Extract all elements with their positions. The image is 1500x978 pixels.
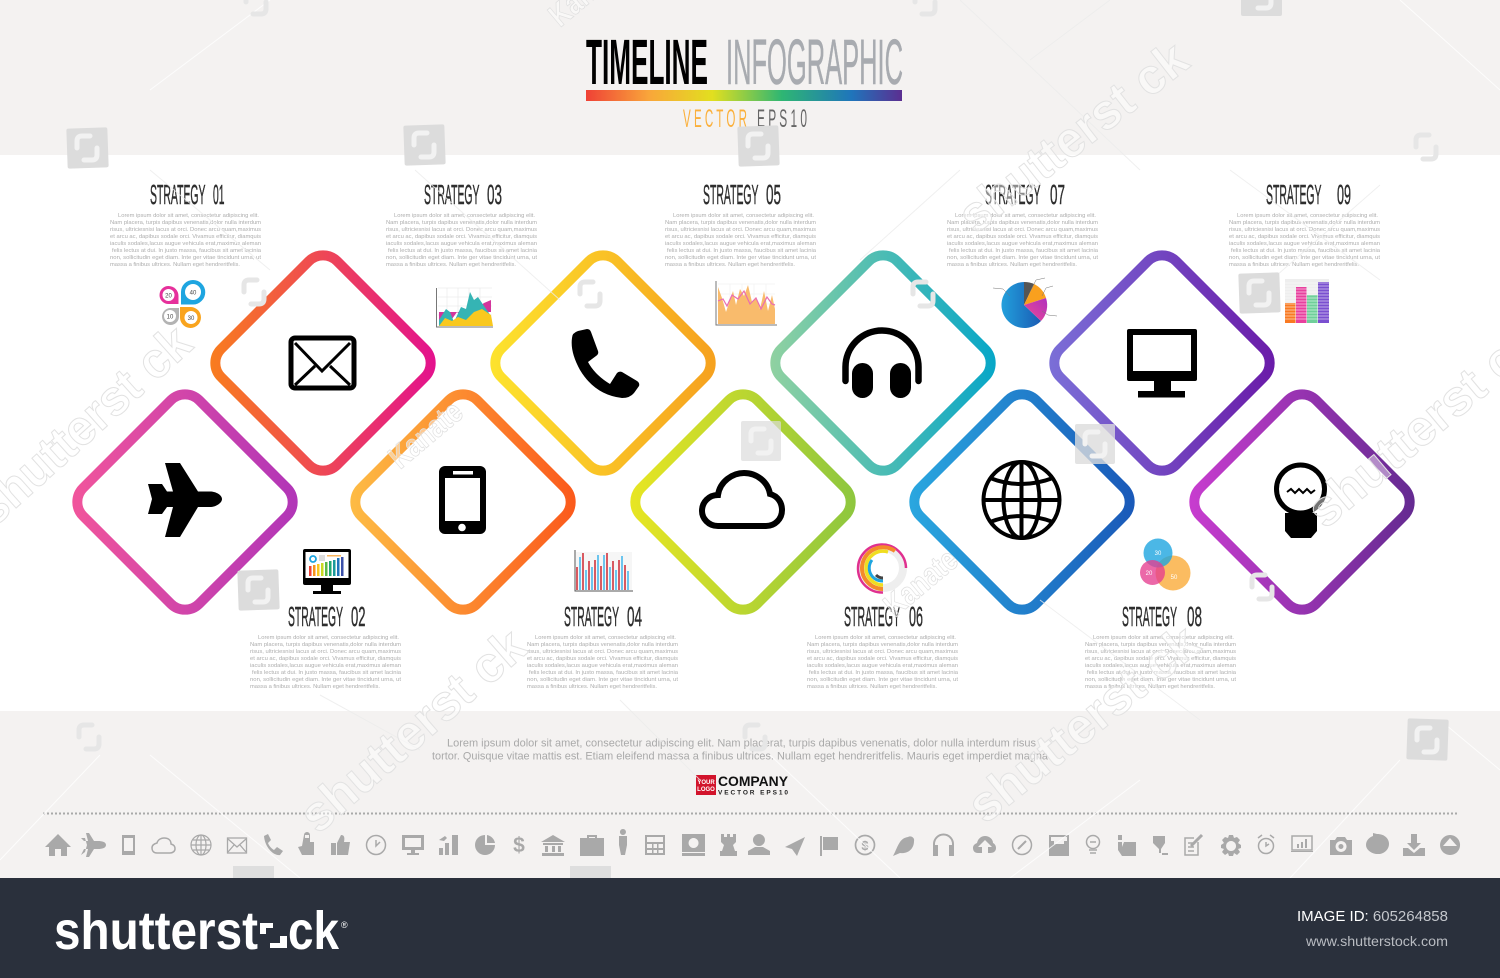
watermark: shutterstock wordmarks: shutterst ck bbox=[957, 614, 1210, 834]
icon strip bbox=[45, 829, 1460, 857]
strategy 06 text: STRATEGY bbox=[844, 601, 900, 632]
strategy 03 text: risus, ultriciesnisi lacus at orci. Donec arcu quam,maximus bbox=[386, 227, 537, 233]
strategy 04 text bbox=[527, 601, 679, 690]
chart: four number petals: 20 bbox=[165, 294, 172, 300]
strategy 07 text: Lorem ipsum dolor sit amet, consectetur adipiscing elit. bbox=[955, 213, 1096, 219]
strategy 04 text: 04 bbox=[627, 601, 642, 632]
icon: calculator bbox=[645, 835, 665, 855]
strategy 07 text: iaculis sodales,lacus augue vehicula erat,maximus aleman bbox=[947, 241, 1098, 247]
icon: flag bbox=[820, 836, 838, 856]
strategy 09 text: felis lectus at dui. In justo massa, faucibus sit amet lacinia bbox=[1231, 248, 1381, 254]
strategy 01 text: et arcu ac, dapibus sodale orci. Vivamus efficitur, diamquis bbox=[110, 234, 261, 240]
icon: thumbs up bbox=[331, 835, 350, 855]
strategy 08 text bbox=[1085, 601, 1237, 690]
icon: monitor bbox=[402, 835, 424, 855]
strategy 07 text: et arcu ac, dapibus sodale orci. Vivamus efficitur, diamquis bbox=[947, 234, 1098, 240]
icon: plane bbox=[81, 833, 106, 857]
strategy 07 text bbox=[947, 179, 1099, 268]
strategy 07 text: Nam placera, turpis dapibus venenatis,dolor nulla interdum bbox=[947, 220, 1098, 226]
strategy 08 text: et arcu ac, dapibus sodale orci. Vivamus efficitur, diamquis bbox=[1085, 656, 1236, 662]
chart: four number petals: 10 bbox=[167, 314, 174, 320]
title: E P S 1 0 bbox=[757, 105, 807, 133]
strategy 01 text: non, sollicitudin eget diam. Inte ger vitae tincidunt urna, ut bbox=[110, 255, 261, 261]
strategy 05 text: STRATEGY bbox=[703, 179, 759, 210]
strategy 08 text: risus, ultriciesnisi lacus at orci. Donec arcu quam,maximus bbox=[1085, 649, 1236, 655]
strategy 04 text: massa a finibus ultrices. Nullam eget hendreritfelis. bbox=[527, 684, 657, 690]
strategy 03 text: STRATEGY bbox=[424, 179, 480, 210]
chart: red and blue bars bbox=[575, 550, 633, 591]
icon: pen nib bbox=[1153, 836, 1168, 855]
icon: coin: $ bbox=[861, 838, 869, 853]
chart: striped bars bbox=[1285, 279, 1329, 323]
strategy 03 text: Nam placera, turpis dapibus venenatis,dolor nulla interdum bbox=[386, 220, 537, 226]
company logo: COMPANY bbox=[718, 774, 788, 789]
icon: user bbox=[748, 834, 770, 855]
footer paragraph bbox=[432, 738, 1048, 762]
watermark: shutterstock wordmarks: shutterst ck bbox=[288, 617, 537, 843]
chart: four number petals bbox=[160, 280, 205, 328]
strategy 06 text: non, sollicitudin eget diam. Inte ger vitae tincidunt urna, ut bbox=[807, 677, 958, 683]
strategy 09 text bbox=[1229, 179, 1381, 268]
strategy 06 text: massa a finibus ultrices. Nullam eget hendreritfelis. bbox=[807, 684, 937, 690]
watermark: contributor names: Kanate bbox=[876, 541, 965, 623]
icon: gear bbox=[1221, 835, 1241, 856]
chart: dashboard monitor bbox=[303, 549, 351, 594]
strategy 07 text: non, sollicitudin eget diam. Inte ger vitae tincidunt urna, ut bbox=[947, 255, 1098, 261]
company logo: LOGO bbox=[697, 787, 715, 793]
strategy 01 text: iaculis sodales,lacus augue vehicula erat,maximus aleman bbox=[110, 241, 261, 247]
watermark: shutterstock wordmarks: shutterst ck bbox=[947, 30, 1199, 244]
strategy 02 text: massa a finibus ultrices. Nullam eget hendreritfelis. bbox=[250, 684, 380, 690]
icon: piggy bank bbox=[1366, 833, 1389, 854]
strategy 02 text: felis lectus at dui. In justo massa, faucibus sit amet lacinia bbox=[252, 670, 402, 676]
strategy 07 text: massa a finibus ultrices. Nullam eget hendreritfelis. bbox=[947, 262, 1077, 268]
strategy 02 text: Nam placera, turpis dapibus venenatis,dolor nulla interdum bbox=[250, 642, 401, 648]
chart: venn: 50 bbox=[1171, 575, 1178, 581]
chart: venn: 20 bbox=[1146, 571, 1153, 577]
strategy 06 text: Nam placera, turpis dapibus venenatis,dolor nulla interdum bbox=[807, 642, 958, 648]
icon: cloud upload bbox=[973, 836, 996, 853]
icon: alarm clock bbox=[1258, 835, 1274, 854]
strategy 09 text: non, sollicitudin eget diam. Inte ger vitae tincidunt urna, ut bbox=[1229, 255, 1380, 261]
strategy 03 text: massa a finibus ultrices. Nullam eget hendreritfelis. bbox=[386, 262, 516, 268]
strategy 05 text: massa a finibus ultrices. Nullam eget hendreritfelis. bbox=[665, 262, 795, 268]
watermark: contributor names bbox=[381, 0, 965, 623]
chart: four number petals: 40 bbox=[190, 290, 197, 296]
strategy 01 text bbox=[110, 179, 262, 268]
strategy 08 text: non, sollicitudin eget diam. Inte ger vitae tincidunt urna, ut bbox=[1085, 677, 1236, 683]
strategy 05 text: et arcu ac, dapibus sodale orci. Vivamus efficitur, diamquis bbox=[665, 234, 816, 240]
strategy 06 text: risus, ultriciesnisi lacus at orci. Donec arcu quam,maximus bbox=[807, 649, 958, 655]
icon: camera bbox=[1330, 837, 1352, 855]
icon: touch bbox=[298, 832, 314, 855]
icon: archive box bbox=[1049, 835, 1069, 856]
strategy 08 text: iaculis sodales,lacus augue vehicula erat,maximus aleman bbox=[1085, 663, 1236, 669]
company logo: YOUR bbox=[697, 780, 715, 786]
icon: headphones bbox=[934, 835, 953, 855]
strategy 02 text: et arcu ac, dapibus sodale orci. Vivamus efficitur, diamquis bbox=[250, 656, 401, 662]
strategy 04 text: et arcu ac, dapibus sodale orci. Vivamus efficitur, diamquis bbox=[527, 656, 678, 662]
icon: person bbox=[619, 829, 627, 855]
chart: rainbow radial bbox=[858, 545, 906, 593]
strategy 03 text: non, sollicitudin eget diam. Inte ger vitae tincidunt urna, ut bbox=[386, 255, 537, 261]
shutterstock logo: shutterst bbox=[54, 901, 258, 961]
strategy 09 text: Lorem ipsum dolor sit amet, consectetur adipiscing elit. bbox=[1237, 213, 1378, 219]
diamond 4: telephone bbox=[487, 247, 719, 479]
icon: pie bbox=[475, 835, 495, 855]
title: V E C T O R bbox=[683, 105, 747, 133]
strategy 09 text: et arcu ac, dapibus sodale orci. Vivamus efficitur, diamquis bbox=[1229, 234, 1380, 240]
strategy 06 text: 06 bbox=[909, 601, 923, 632]
strategy 08 text: Nam placera, turpis dapibus venenatis,dolor nulla interdum bbox=[1085, 642, 1236, 648]
strategy 04 text: iaculis sodales,lacus augue vehicula erat,maximus aleman bbox=[527, 663, 678, 669]
strategy 08 text: 08 bbox=[1187, 601, 1202, 632]
strategy 07 text: risus, ultriciesnisi lacus at orci. Donec arcu quam,maximus bbox=[947, 227, 1098, 233]
shutterstock logo: ck bbox=[288, 901, 340, 961]
icon: paper plane bbox=[785, 837, 805, 856]
strategy 08 text: Lorem ipsum dolor sit amet, consectetur adipiscing elit. bbox=[1093, 635, 1234, 641]
strategy 03 text: 03 bbox=[487, 179, 502, 210]
diamond 2: envelope bbox=[207, 247, 439, 479]
strategy 08 text: massa a finibus ultrices. Nullam eget hendreritfelis. bbox=[1085, 684, 1215, 690]
icon: telephone bbox=[264, 834, 283, 855]
strategy 05 text: Nam placera, turpis dapibus venenatis,dolor nulla interdum bbox=[665, 220, 816, 226]
icon: bulb bbox=[1086, 836, 1100, 853]
strategy 03 text: Lorem ipsum dolor sit amet, consectetur adipiscing elit. bbox=[394, 213, 535, 219]
title: TIMELINE bbox=[586, 26, 708, 98]
strategy 09 text: 09 bbox=[1337, 179, 1351, 210]
company logo bbox=[696, 774, 788, 796]
strategy 07 text: 07 bbox=[1050, 179, 1065, 210]
icon: globe bbox=[191, 835, 211, 855]
footer paragraph: tortor. Quisque vitae mattis est. Etiam eleifend massa a finibus ultrices. Nullam eget hendreritfelis. Mauris eget imperdiet magna bbox=[432, 750, 1048, 762]
watermark: contributor names: Kanate bbox=[381, 393, 470, 475]
strategy 05 text: 05 bbox=[766, 179, 781, 210]
icon: bank bbox=[541, 835, 565, 856]
strategy 03 text bbox=[386, 179, 538, 268]
diamond 9: light bulb bbox=[1186, 386, 1418, 618]
title bbox=[586, 26, 903, 133]
strategy 06 text: et arcu ac, dapibus sodale orci. Vivamus efficitur, diamquis bbox=[807, 656, 958, 662]
icon: bird bbox=[893, 836, 914, 856]
strategy 02 text: non, sollicitudin eget diam. Inte ger vitae tincidunt urna, ut bbox=[250, 677, 401, 683]
strategy 02 text: STRATEGY bbox=[288, 601, 343, 632]
strategy 01 text: 01 bbox=[213, 179, 224, 210]
strategy 04 text: non, sollicitudin eget diam. Inte ger vitae tincidunt urna, ut bbox=[527, 677, 678, 683]
diamond 8: monitor bbox=[1046, 247, 1278, 479]
chart: orange line chart bbox=[716, 281, 777, 325]
strategy 09 text: risus, ultriciesnisi lacus at orci. Donec arcu quam,maximus bbox=[1229, 227, 1380, 233]
strategy 06 text bbox=[807, 601, 959, 690]
icon: briefcase bbox=[580, 835, 604, 856]
strategy 05 text: Lorem ipsum dolor sit amet, consectetur adipiscing elit. bbox=[673, 213, 814, 219]
strategy 09 text: Nam placera, turpis dapibus venenatis,dolor nulla interdum bbox=[1229, 220, 1380, 226]
strategy 02 text: iaculis sodales,lacus augue vehicula erat,maximus aleman bbox=[250, 663, 401, 669]
company logo: VECTOR EPS10 bbox=[718, 790, 788, 796]
strategy 05 text: risus, ultriciesnisi lacus at orci. Donec arcu quam,maximus bbox=[665, 227, 816, 233]
icon: download bbox=[1403, 834, 1425, 856]
text: INFOGRAPHIC bbox=[726, 26, 903, 98]
strategy 05 text: felis lectus at dui. In justo massa, faucibus sit amet lacinia bbox=[667, 248, 817, 254]
strategy 01 text: Lorem ipsum dolor sit amet, consectetur adipiscing elit. bbox=[118, 213, 259, 219]
diamond 5: cloud bbox=[627, 386, 859, 618]
icon: banknote bbox=[682, 834, 705, 856]
strategy 09 text: STRATEGY bbox=[1266, 179, 1322, 210]
icon: notepad bbox=[1185, 835, 1202, 855]
strategy 03 text: et arcu ac, dapibus sodale orci. Vivamus efficitur, diamquis bbox=[386, 234, 537, 240]
strategy 07 text: STRATEGY bbox=[985, 179, 1041, 210]
icon: bar chart bbox=[439, 835, 458, 855]
strategy 01 text: massa a finibus ultrices. Nullam eget hendreritfelis. bbox=[110, 262, 240, 268]
strategy 03 text: felis lectus at dui. In justo massa, faucibus sit amet lacinia bbox=[388, 248, 538, 254]
footer bar bbox=[0, 878, 1500, 978]
shutterstock logo: ® bbox=[341, 920, 348, 930]
website: www.shutterstock.com bbox=[1305, 933, 1448, 949]
strategy 06 text: Lorem ipsum dolor sit amet, consectetur adipiscing elit. bbox=[815, 635, 956, 641]
icon: compass bbox=[1012, 836, 1032, 854]
strategy 02 text: risus, ultriciesnisi lacus at orci. Donec arcu quam,maximus bbox=[250, 649, 401, 655]
strategy 04 text: Nam placera, turpis dapibus venenatis,dolor nulla interdum bbox=[527, 642, 678, 648]
strategy 03 text: iaculis sodales,lacus augue vehicula erat,maximus aleman bbox=[386, 241, 537, 247]
icon: mobile bbox=[122, 835, 135, 855]
strategy 02 text: 02 bbox=[351, 601, 366, 632]
diamond 1: plane bbox=[69, 386, 301, 618]
icon: pointing hand bbox=[1118, 835, 1136, 856]
icon: clock bbox=[366, 836, 386, 854]
chart: venn: 30 bbox=[1155, 551, 1162, 557]
strategy 01 text: STRATEGY bbox=[150, 179, 206, 210]
strategy 05 text bbox=[665, 179, 817, 268]
strategy 05 text: non, sollicitudin eget diam. Inte ger vitae tincidunt urna, ut bbox=[665, 255, 816, 261]
strategy 04 text: Lorem ipsum dolor sit amet, consectetur adipiscing elit. bbox=[535, 635, 676, 641]
image id: IMAGE ID: 605264858 bbox=[1297, 909, 1448, 925]
chart: pie bbox=[993, 278, 1057, 328]
icon: cloud bbox=[152, 838, 175, 853]
strategy 01 text: felis lectus at dui. In justo massa, faucibus sit amet lacinia bbox=[112, 248, 262, 254]
strategy 01 text: Nam placera, turpis dapibus venenatis,dolor nulla interdum bbox=[110, 220, 261, 226]
icon: home bbox=[45, 834, 71, 856]
strategy 05 text: iaculis sodales,lacus augue vehicula erat,maximus aleman bbox=[665, 241, 816, 247]
chart: four number petals: 30 bbox=[188, 316, 195, 322]
strategy 08 text: felis lectus at dui. In justo massa, faucibus sit amet lacinia bbox=[1087, 670, 1237, 676]
strategy 02 text bbox=[250, 601, 402, 690]
strategy 02 text: Lorem ipsum dolor sit amet, consectetur adipiscing elit. bbox=[258, 635, 399, 641]
strategy 01 text: risus, ultriciesnisi lacus at orci. Donec arcu quam,maximus bbox=[110, 227, 261, 233]
strategy 09 text: iaculis sodales,lacus augue vehicula erat,maximus aleman bbox=[1229, 241, 1380, 247]
icon: chess rook bbox=[720, 834, 737, 856]
strategy 04 text: risus, ultriciesnisi lacus at orci. Donec arcu quam,maximus bbox=[527, 649, 678, 655]
icon: shield ball bbox=[1440, 835, 1460, 855]
icon: envelope bbox=[228, 838, 246, 853]
strategy 07 text: felis lectus at dui. In justo massa, faucibus sit amet lacinia bbox=[949, 248, 1099, 254]
dotted divider bbox=[43, 812, 1457, 814]
strategy 08 text: STRATEGY bbox=[1122, 601, 1177, 632]
diamond 7: globe bbox=[906, 386, 1138, 618]
chart: venn bbox=[1140, 538, 1190, 590]
diamond 6: headphones bbox=[767, 247, 999, 479]
icon: dollar: $ bbox=[513, 834, 525, 857]
strategy 06 text: felis lectus at dui. In justo massa, faucibus sit amet lacinia bbox=[809, 670, 959, 676]
strategy 09 text: massa a finibus ultrices. Nullam eget hendreritfelis. bbox=[1229, 262, 1359, 268]
strategy 04 text: felis lectus at dui. In justo massa, faucibus sit amet lacinia bbox=[529, 670, 679, 676]
chart: area chart bbox=[436, 288, 493, 327]
footer paragraph: Lorem ipsum dolor sit amet, consectetur adipiscing elit. Nam placerat, turpis dapibus venenatis, dolor nulla interdum risus bbox=[447, 738, 1037, 750]
strategy 04 text: STRATEGY bbox=[564, 601, 619, 632]
watermark: outline marks bbox=[79, 0, 1436, 749]
diamond 3: smartphone bbox=[347, 386, 579, 618]
icon: coin bbox=[856, 836, 874, 854]
strategy 06 text: iaculis sodales,lacus augue vehicula erat,maximus aleman bbox=[807, 663, 958, 669]
icon: presentation board bbox=[1291, 836, 1313, 852]
